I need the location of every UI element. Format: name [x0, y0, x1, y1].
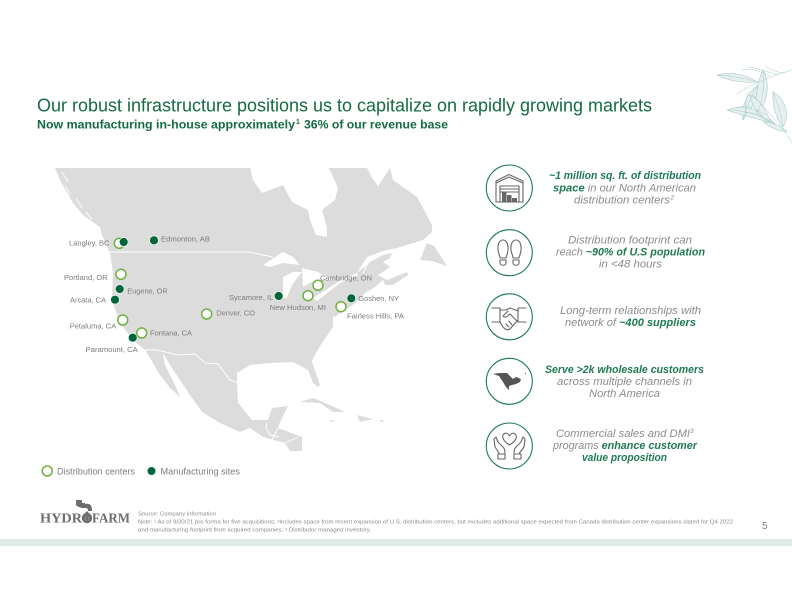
text: customer value: [552, 428, 698, 464]
text: customer value: value proposition: [582, 452, 668, 464]
map legend: Distribution centers: [57, 466, 135, 476]
location labels: Paramount, CA: [86, 345, 139, 354]
text: distribution space: space in our North American: [553, 182, 696, 194]
location labels: Arcata, CA: [70, 296, 107, 305]
location labels: Portland, OR: [64, 273, 108, 282]
subtitle: Now manufacturing in-house approximately: [37, 117, 295, 131]
location labels: Petaluma, CA: [70, 322, 117, 331]
location labels: Fairless Hills, PA: [347, 312, 405, 321]
text: customer value: 3: [690, 428, 694, 435]
Newfoundland and Caribbean islands: [300, 243, 447, 422]
location labels: Eugene, OR: [127, 287, 168, 296]
text: customer value: Commercial sales and DMI: [556, 428, 690, 440]
location labels: Denver, CO: [216, 309, 255, 318]
subtitle: [37, 117, 448, 131]
footnotes: Source: Company information: [138, 512, 216, 518]
location labels: Fontana, CA: [150, 329, 193, 338]
footnotes: Note: ¹ As of 9/30/21 pro forma for five acquisitions; ²Includes space from recent expansion of U.S. distribution centers, but excludes additional space expected from Canada distribution center expansions slated for Q4 2022: [138, 520, 733, 526]
location labels: [64, 234, 405, 354]
footnotes: [138, 512, 733, 534]
footer bar: [0, 539, 792, 546]
location labels: Cambridge, ON: [320, 273, 372, 282]
text: suppliers: [560, 305, 701, 329]
title: Our robust infrastructure positions us to capitalize on rapidly growing markets: [37, 96, 652, 116]
location labels: Goshen, NY: [358, 294, 399, 303]
Hydrofarm logo: [40, 500, 130, 526]
location labels: Langley, BC: [69, 239, 110, 248]
map of North America: [55, 168, 447, 451]
text: distribution space: distribution centers: [574, 194, 671, 206]
location labels: Edmonton, AB: [161, 234, 210, 243]
footnotes: and manufacturing footprint from acquired companies; ³ Distributor managed inventory.: [138, 528, 371, 534]
subtitle: 36% of our revenue base: [304, 117, 448, 131]
text: suppliers: Long-term relationships with: [560, 305, 701, 317]
text: wholesale customers: North America: [589, 388, 660, 400]
great lakes: [263, 252, 358, 301]
text: distribution footprint: Distribution footprint can: [568, 234, 692, 246]
text: distribution space: 2: [670, 194, 674, 202]
subtitle: 1: [296, 119, 300, 126]
page number: 5: [762, 521, 768, 532]
decorative leaf illustration: [717, 66, 792, 143]
map legend: [42, 466, 241, 476]
land mass: [55, 168, 432, 451]
text: distribution footprint: reach ~90% of U.S population: [556, 246, 706, 258]
map legend: Manufacturing sites: [160, 466, 241, 476]
Hydrofarm logo: FARM: [92, 510, 130, 526]
icon: footprints: [486, 230, 532, 276]
icon: handshake: [486, 294, 532, 340]
text: distribution space: ~1 million sq. ft. of distribution: [549, 170, 702, 182]
text: suppliers: network of ~400 suppliers: [565, 317, 696, 329]
Hydrofarm logo: O: [84, 515, 90, 523]
Hydrofarm logo: HYDR: [40, 510, 82, 526]
icon: North America map: [486, 358, 532, 404]
location markers: [111, 236, 356, 342]
borders: [62, 172, 368, 443]
icon: hands holding heart: [486, 423, 532, 469]
text: distribution footprint: [556, 234, 706, 270]
icon: warehouse: [486, 165, 532, 211]
text: distribution space: [549, 170, 702, 206]
text: customer value: programs enhance customer: [552, 440, 698, 452]
text: wholesale customers: [545, 364, 704, 400]
text: wholesale customers: Serve >2k wholesale customers: [545, 364, 704, 376]
location labels: New Hudson, MI: [270, 303, 326, 312]
text: distribution footprint: in <48 hours: [599, 258, 663, 270]
location labels: Sycamore, IL: [229, 293, 273, 302]
text: wholesale customers: across multiple channels in: [557, 376, 692, 388]
